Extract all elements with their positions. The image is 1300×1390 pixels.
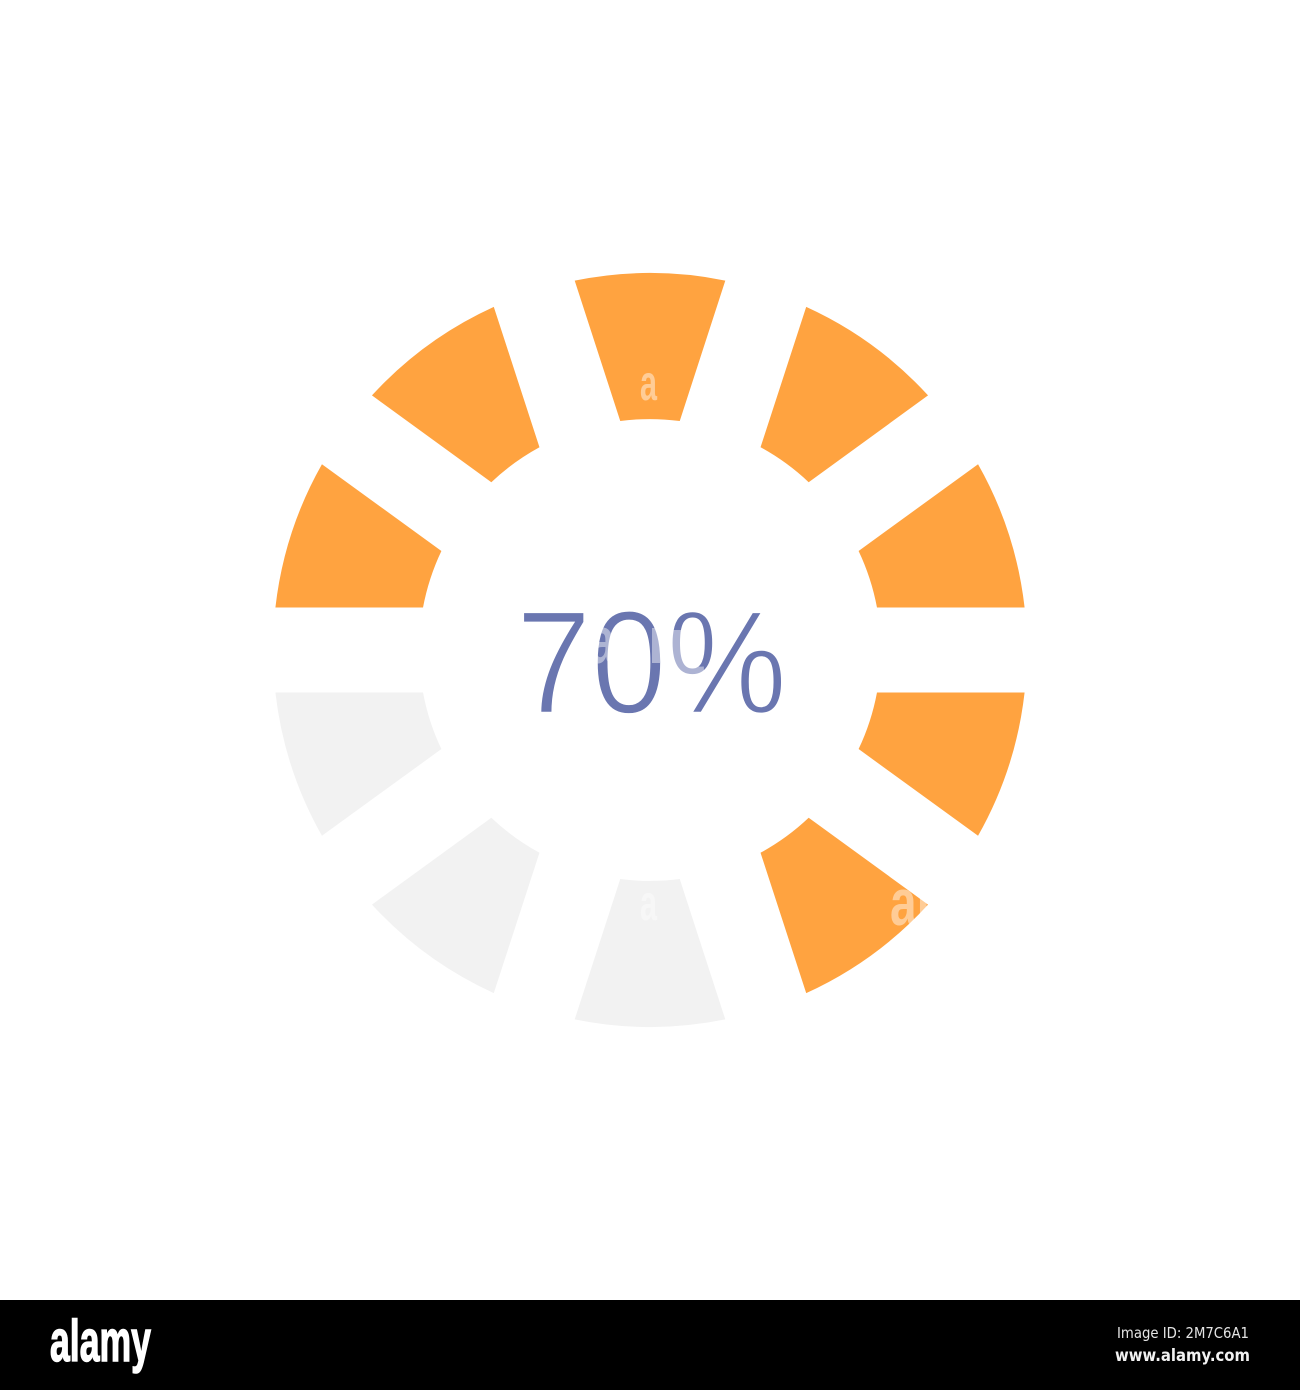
segment 6: empty (575, 879, 725, 1027)
watermark: letter over percentage: a (589, 603, 616, 677)
segment 5: filled (724, 791, 933, 999)
footer background (0, 1300, 1300, 1390)
segment 3: filled (845, 462, 1032, 651)
watermark: top segment letter: a (640, 355, 658, 411)
website: www.alamy.com (1115, 1346, 1250, 1366)
image id: Image ID: 2M7C6A1 (1117, 1324, 1249, 1342)
watermark: curve over percentage (677, 630, 704, 671)
segment 1: filled (575, 273, 725, 421)
percentage value: 70% (516, 581, 787, 745)
watermark: bar over percentage (652, 628, 660, 663)
radial progress chart (268, 273, 1032, 1027)
segment 10: filled (367, 301, 576, 509)
segment 4: filled (845, 649, 1032, 838)
watermark: bottom segment letter: a (640, 875, 658, 931)
footer logo: alamy (50, 1309, 151, 1374)
segment 7: empty (367, 791, 576, 999)
segment 8: empty (268, 649, 455, 838)
watermark: lower right segment letters: al (890, 865, 930, 939)
footer bar (0, 1300, 1300, 1390)
segment 2: filled (724, 301, 933, 509)
watermark fragments (589, 355, 930, 939)
segment 9: filled (268, 462, 455, 651)
